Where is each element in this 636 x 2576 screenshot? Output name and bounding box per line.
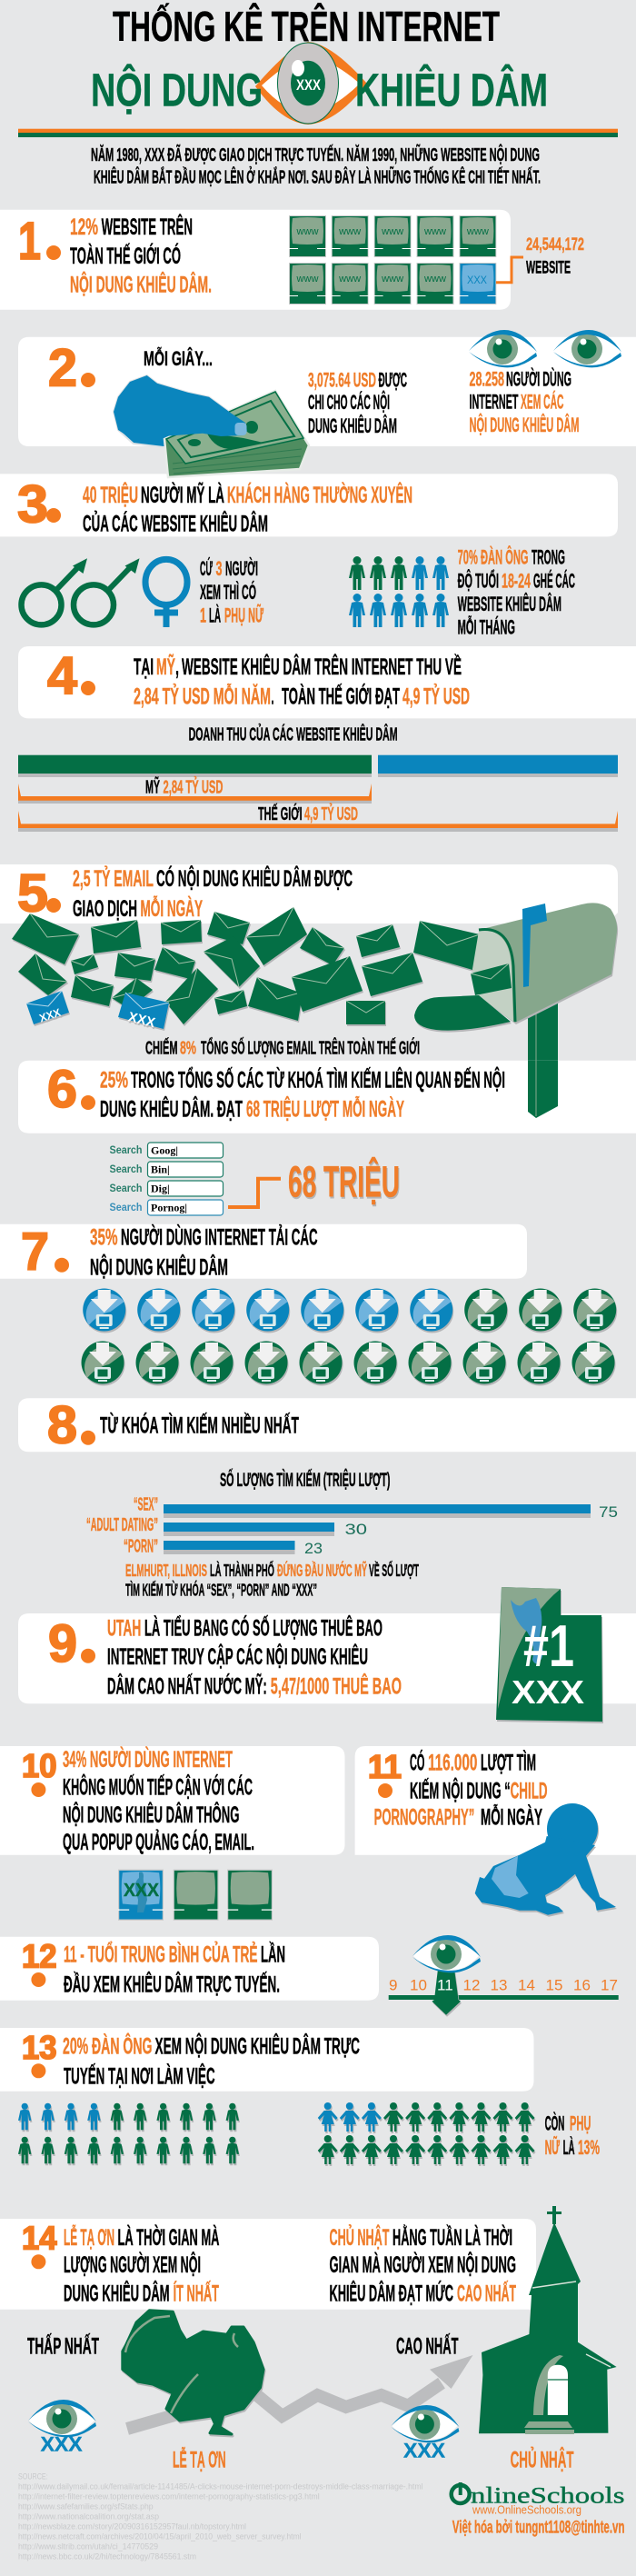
- women percentage text: [545, 2112, 600, 2159]
- text block: [100, 1066, 505, 1122]
- one in three text: LÀ: [209, 604, 221, 626]
- icon grid: monitors: www: [338, 226, 361, 237]
- text block: [90, 1223, 318, 1281]
- text block: CHILD: [511, 1778, 548, 1803]
- icon: crawling baby: [475, 1803, 616, 1915]
- website count: 24,544,172: [526, 235, 584, 255]
- text block: CỦA CÁC WEBSITE KHIÊU DÂM: [83, 509, 268, 536]
- blue envelope small: [26, 991, 69, 1024]
- icon grid: monitors: [289, 216, 496, 304]
- viewers text: [469, 367, 580, 436]
- one in three text: NGƯỜI: [225, 557, 258, 580]
- number 8: [47, 1395, 95, 1454]
- revenue chart: [18, 723, 618, 832]
- number 6: [47, 1060, 95, 1119]
- men 18-24 text: ĐỘ TUỔI: [458, 569, 499, 592]
- number 4: 4: [47, 646, 77, 705]
- bar chart: search volume: VỀ SỐ LƯỢT: [369, 1561, 419, 1580]
- empty monitors: [174, 1870, 273, 1920]
- men 18-24 text: TRONG: [532, 546, 565, 569]
- text block: 2,84 TỶ USD MỖI NĂM: [134, 682, 271, 709]
- bar: porn: “PORN”: [124, 1536, 158, 1556]
- bar: sex: “SEX”: [134, 1495, 158, 1515]
- text block: CÓ: [410, 1748, 424, 1775]
- number 11: 11: [368, 1748, 402, 1785]
- logo url: www.OnlineSchools.org: [472, 2503, 581, 2517]
- chart title: SỐ LƯỢNG TÌM KIẾM (TRIỆU LƯỢT): [220, 1469, 391, 1491]
- age numbers: 10: [410, 1976, 427, 1993]
- age numbers: [389, 1976, 618, 1993]
- bar: adult dating: 30: [345, 1521, 367, 1538]
- panel 14: lowest and highest days: CAO NHẤT: [457, 2281, 516, 2307]
- number 2: [48, 338, 95, 397]
- search box Dig: Search: [109, 1182, 142, 1194]
- viewers text: INTERNET: [469, 390, 519, 413]
- proportion bars: [18, 755, 618, 777]
- icon: eye with XXX pupil: XXX: [296, 76, 322, 94]
- number 14: 14: [22, 2219, 56, 2256]
- xxx monitor: [118, 1870, 164, 1920]
- icon: Utah map: [496, 1587, 602, 1722]
- mailbox flag: [522, 904, 547, 987]
- search box Goog: Search: [109, 1143, 142, 1156]
- panel 14: lowest and highest days: [0, 2219, 536, 2310]
- text block: TUYẾN TẠI NƠI LÀM VIỆC: [64, 2062, 215, 2089]
- text block: [70, 213, 212, 298]
- age numbers: 12: [463, 1976, 480, 1993]
- money stack: [164, 391, 309, 477]
- world label: THẾ GIỚI: [258, 803, 303, 824]
- xxx low: XXX: [41, 2433, 83, 2456]
- blue xxx envelopes: [26, 991, 169, 1031]
- row 2: [82, 1342, 614, 1383]
- mailbox post: [528, 1000, 558, 1118]
- viewers text: XEM CÁC: [521, 390, 564, 413]
- one in three text: 3: [216, 557, 222, 580]
- panel 2: every second: ĐƯỢC: [378, 368, 407, 391]
- search box Pornog: [109, 1200, 224, 1215]
- money spent text: CHI CHO CÁC NỘI: [308, 391, 390, 414]
- title line 2: KHIÊU DÂM: [355, 64, 548, 116]
- US label: MỸ: [145, 776, 160, 798]
- text block: [64, 1940, 285, 1998]
- text block: [83, 481, 412, 536]
- sources: http://news.netcraft.com/archives/2010/04/15/april_2010_web_server_survey.html: [18, 2531, 302, 2541]
- panel 9: Utah: [18, 1587, 636, 1722]
- age numbers: 17: [601, 1976, 618, 1993]
- blue envelope large: XXX: [126, 1009, 157, 1031]
- blue envelope small: XXX: [37, 1006, 63, 1024]
- panel 8: top keywords: [18, 1395, 636, 1454]
- number 3: 3: [17, 474, 48, 534]
- xxx high: XXX: [403, 2439, 445, 2461]
- text block: NGƯỜI DÙNG INTERNET TẢI CÁC: [121, 1223, 318, 1250]
- text block: UTAH: [107, 1615, 141, 1641]
- heading: TỪ KHÓA TÌM KIẾM NHIỀU NHẤT: [100, 1412, 299, 1439]
- Thanksgiving text: ÍT NHẤT: [174, 2281, 219, 2307]
- age numbers: 15: [545, 1976, 562, 1993]
- pictogram: ten men: [349, 556, 449, 627]
- age axis: [389, 1995, 619, 2000]
- text block: TẠI: [134, 654, 154, 680]
- panel 10: popups: [0, 1745, 345, 1855]
- city note: ĐỨNG ĐẦU NƯỚC MỸ: [277, 1561, 367, 1580]
- panel 2: every second: [18, 330, 636, 446]
- panel 4: revenue: [18, 646, 636, 718]
- Thanksgiving text: LÀ THỜI GIAN MÀ: [118, 2223, 220, 2251]
- panel 5: emails: [0, 864, 618, 924]
- bar: sex: [134, 1495, 618, 1521]
- logo name: nlineSchools: [471, 2483, 625, 2508]
- header: [18, 3, 618, 188]
- icon: eye high: [391, 2405, 459, 2442]
- mailbox rim: [479, 929, 515, 1022]
- icon grid: monitors: www: [381, 226, 403, 237]
- caption: share of emails: TỔNG SỐ LƯỢNG EMAIL TRÊN TOÀN THẾ GIỚI: [201, 1036, 420, 1058]
- Sunday text: CHỦ NHẬT: [329, 2223, 389, 2251]
- bar: sex: 75: [599, 1503, 618, 1521]
- icon grid: monitors: www: [338, 274, 361, 285]
- number 7: [21, 1223, 69, 1282]
- Sunday text: KHIÊU DÂM ĐẠT MỨC: [329, 2280, 453, 2307]
- text block: KHÔNG MUỐN TIẾP CẬN VỚI CÁC: [63, 1772, 253, 1800]
- men 18-24 text: 18-24: [502, 569, 531, 592]
- connector: [496, 257, 523, 283]
- icon: eye with XXX pupil: [255, 42, 367, 125]
- search box Bin: Bin|: [151, 1163, 170, 1176]
- panel 7: downloads: [0, 1223, 527, 1282]
- text block: INTERNET TRUY CẬP CÁC NỘI DUNG KHIÊU: [107, 1642, 368, 1670]
- city note: ELMHURT, ILLNOIS: [125, 1562, 207, 1580]
- text block: PORNOGRAPHY”: [374, 1805, 474, 1831]
- text block: 25%: [100, 1068, 128, 1093]
- connector: [228, 1179, 281, 1207]
- text block: DÂM CAO NHẤT NƯỚC MỸ:: [107, 1672, 267, 1699]
- number 9: [48, 1614, 95, 1673]
- header rule: [18, 129, 618, 137]
- icon: Utah map: #1: [523, 1612, 574, 1679]
- text block: LÀ TIỂU BANG CÓ SỐ LƯỢNG THUÊ BAO: [144, 1613, 383, 1641]
- text block: 40 TRIỆU: [83, 481, 138, 508]
- US label: [145, 776, 224, 798]
- number 2: 2: [48, 338, 77, 397]
- pictogram: women: [318, 2102, 535, 2164]
- Sunday text: [329, 2223, 516, 2307]
- one in three text: CỨ: [200, 557, 213, 580]
- blue envelope large: [118, 993, 169, 1031]
- icon: Utah map: XXX: [512, 1673, 584, 1711]
- text block: 116.000: [428, 1750, 477, 1775]
- hand back: [114, 375, 238, 450]
- Thanksgiving text: DUNG KHIÊU DÂM: [64, 2280, 170, 2307]
- popup monitors: [118, 1870, 273, 1920]
- male symbol 1: [22, 558, 87, 624]
- label: highest: CAO NHẤT: [396, 2332, 458, 2359]
- money spent text: [308, 368, 407, 437]
- envelope flaps: [30, 907, 480, 1013]
- bar chart: search volume: [86, 1469, 618, 1600]
- age numbers: 16: [573, 1976, 591, 1993]
- world bracket: [18, 811, 618, 832]
- number 9: 9: [48, 1614, 77, 1673]
- text block: ĐẦU XEM KHIÊU DÂM TRỰC TUYẾN.: [64, 1971, 280, 1998]
- icon: church: [479, 2206, 617, 2434]
- text block: WEBSITE TRÊN: [102, 213, 193, 240]
- text block: 2,5 TỶ EMAIL: [73, 864, 154, 892]
- envelope cluster: [12, 907, 480, 1024]
- US bracket: [18, 784, 372, 804]
- text block: 20% ĐÀN ÔNG: [63, 2032, 152, 2059]
- panel 12: average age: [0, 1937, 379, 2001]
- sources: http://newsblaze.com/story/20090316152957faul.nb/topstory.html: [18, 2521, 246, 2531]
- number 1: [18, 212, 61, 271]
- marker: [432, 1969, 461, 2015]
- text block: NỘI DUNG KHIÊU DÂM THÔNG: [63, 1801, 239, 1828]
- text block: KIẾM NỘI DUNG “: [410, 1776, 511, 1803]
- number 4: [47, 646, 95, 705]
- sources: http://internet-filter-review.toptenreviews.com/internet-pornography-statistics-pg3.html: [18, 2491, 320, 2501]
- text block: [374, 1748, 548, 1831]
- number 5: 5: [17, 864, 48, 924]
- flying envelopes: [12, 907, 480, 1024]
- text: LỄ TẠ ƠN: [173, 2445, 226, 2472]
- text block: MỖI NGÀY: [140, 894, 203, 922]
- section 3 visuals: [22, 546, 575, 638]
- viewers text: 28.258: [469, 367, 504, 390]
- title line 2: NỘI DUNG: [91, 64, 263, 116]
- text block: KHÁCH HÀNG THƯỜNG XUYÊN: [227, 481, 412, 508]
- women percentage text: LÀ: [563, 2136, 575, 2159]
- panel 11: child keyword: [355, 1746, 636, 1915]
- world label: 4,9 TỶ USD: [304, 804, 358, 824]
- search box Dig: Dig|: [151, 1182, 170, 1194]
- text block: DUNG KHIÊU DÂM. ĐẠT: [100, 1094, 243, 1122]
- bar: adult dating: [86, 1515, 367, 1538]
- text block: [107, 1613, 402, 1699]
- callout: 68 million: 68 TRIỆU: [288, 1157, 400, 1207]
- website count: WEBSITE: [526, 259, 571, 278]
- icon grid: monitors: www: [295, 226, 319, 237]
- text block: NGƯỜI MỸ LÀ: [141, 481, 224, 508]
- text block: CÓ NỘI DUNG KHIÊU DÂM ĐƯỢC: [156, 864, 353, 892]
- icon grid: monitors: XXX: [467, 274, 487, 286]
- search box Pornog: Pornog|: [151, 1202, 187, 1214]
- one in three text: PHỤ NỮ: [224, 604, 263, 626]
- arrow: rising trend: [127, 2355, 472, 2429]
- website count: [526, 235, 584, 278]
- sources: [18, 2471, 423, 2561]
- number 6: 6: [47, 1060, 77, 1119]
- number 12: 12: [22, 1937, 56, 1974]
- text block: [134, 653, 470, 709]
- age numbers: 13: [491, 1976, 507, 1993]
- bar: porn: 23: [304, 1540, 323, 1557]
- age numbers: 14: [518, 1976, 535, 1993]
- number 13: 13: [22, 2029, 56, 2066]
- age scale: [389, 1935, 619, 2015]
- Sunday text: HẰNG TUẦN LÀ THỜI: [393, 2223, 512, 2251]
- bar: porn: [124, 1536, 323, 1557]
- age numbers: 9: [389, 1976, 397, 1993]
- text block: 11 - TUỔI TRUNG BÌNH CỦA TRẺ: [64, 1940, 258, 1967]
- city note: TÌM KIẾM TỪ KHÓA “SEX”, “PORN” AND “XXX”: [125, 1581, 317, 1600]
- number 10: 10: [22, 1747, 56, 1784]
- label: lowest: THẤP NHẤT: [27, 2332, 99, 2359]
- viewers text: NGƯỜI DÙNG: [506, 367, 571, 390]
- caption: share of emails: [145, 1036, 420, 1058]
- city note: [125, 1561, 419, 1600]
- number 8: 8: [47, 1395, 77, 1454]
- icon: hand holding money: [114, 375, 309, 477]
- heading: MỖI GIÂY...: [144, 346, 213, 370]
- search boxes: [109, 1143, 224, 1215]
- icon: eye low: [28, 2400, 96, 2437]
- icon grid: monitors: www: [295, 274, 319, 285]
- search box Pornog: Search: [109, 1201, 142, 1213]
- men 18-24 text: MỖI THÁNG: [458, 614, 515, 638]
- icon grid: monitors: www: [423, 274, 446, 285]
- text block: 35%: [90, 1224, 118, 1250]
- text block: GIAO DỊCH: [73, 896, 137, 922]
- logo: OnlineSchools: [452, 2482, 625, 2538]
- icon grid: monitors: www: [466, 226, 489, 237]
- icon: eye: [412, 1935, 481, 1972]
- search box Bin: Search: [109, 1163, 142, 1175]
- text block: 5,47/1000 THUÊ BAO: [271, 1672, 402, 1699]
- icon: male and female symbols: [22, 558, 187, 627]
- text block: MỖI NGÀY: [481, 1803, 542, 1831]
- pictogram: men: [18, 2103, 239, 2163]
- number 1: 1: [18, 212, 41, 271]
- panel 3: regular customers: [0, 474, 618, 536]
- search box Goog: [109, 1143, 224, 1158]
- male symbol 2: [74, 558, 140, 624]
- icon: turkey: [123, 2311, 263, 2434]
- text block: NỘI DUNG KHIÊU DÂM: [90, 1253, 228, 1281]
- row 1: [83, 1289, 616, 1331]
- Thanksgiving text: [64, 2223, 220, 2307]
- text block: QUA POPUP QUẢNG CÁO, EMAIL.: [63, 1828, 254, 1855]
- number 7: 7: [21, 1223, 49, 1282]
- text block: 68 TRIỆU LƯỢT MỖI NGÀY: [246, 1094, 404, 1122]
- Thanksgiving text: LƯỢNG NGƯỜI XEM NỘI: [64, 2251, 201, 2278]
- text block: LƯỢT TÌM: [481, 1749, 536, 1775]
- one in three text: XEM THÌ CÓ: [200, 581, 256, 604]
- icon grid: monitors: www: [423, 226, 446, 237]
- text block: TOÀN THẾ GIỚI ĐẠT: [282, 682, 400, 709]
- sources: http://www.safefamilies.org/sfStats.php: [18, 2501, 154, 2511]
- women percentage text: CÒN: [545, 2112, 564, 2134]
- women percentage text: NỮ: [545, 2136, 560, 2159]
- bar: adult dating: “ADULT DATING”: [86, 1515, 158, 1535]
- text block: LẦN: [261, 1941, 285, 1967]
- sources: SOURCE:: [18, 2471, 48, 2481]
- chart title: DOANH THU CỦA CÁC WEBSITE KHIÊU DÂM: [189, 723, 398, 744]
- text block: TOÀN THẾ GIỚI CÓ: [70, 242, 181, 269]
- icon: mailbox: [414, 903, 617, 1031]
- mailbox post overlap: [528, 1061, 558, 1118]
- number 3: [17, 474, 61, 534]
- mailbox opening: [472, 931, 513, 1022]
- icon: two eyes: [469, 330, 621, 367]
- xxx monitor: XXX: [124, 1881, 160, 1901]
- caption: share of emails: 8%: [180, 1038, 196, 1058]
- text block: XEM NỘI DUNG KHIÊU DÂM TRỰC: [154, 2032, 360, 2059]
- caption: share of emails: CHIẾM: [145, 1037, 178, 1058]
- US label: 2,84 TỶ USD: [164, 776, 224, 798]
- text block: [63, 2032, 360, 2089]
- sources: http://www.dailymail.co.uk/femail/article-1141485/A-clicks-mouse-internet-porn-destroys-middle-class-marriage-.html: [18, 2481, 423, 2491]
- women percentage text: PHỤ: [570, 2112, 591, 2134]
- text block: ,: [175, 654, 179, 680]
- title line 2: [91, 64, 548, 116]
- one in three text: [200, 557, 263, 626]
- label: Sunday: CHỦ NHẬT: [511, 2445, 574, 2472]
- text block: MỸ: [156, 653, 175, 680]
- money spent text: DUNG KHIÊU DÂM: [308, 414, 397, 437]
- Thanksgiving text: LỄ TẠ ƠN: [64, 2223, 114, 2251]
- women percentage text: 13%: [578, 2136, 600, 2159]
- icon grid: monitors: www: [381, 274, 403, 285]
- panel 6: search keywords: [18, 1060, 636, 1133]
- men 18-24 text: [458, 546, 575, 638]
- search box Goog: Goog|: [151, 1143, 178, 1156]
- city note: LÀ THÀNH PHỐ: [210, 1561, 274, 1580]
- mailbox door: [414, 995, 511, 1031]
- search box Dig: [109, 1181, 224, 1196]
- sources: http://www.sltrib.com/utah/ci_14770529: [18, 2541, 158, 2551]
- one in three text: 1: [200, 604, 206, 626]
- text block: 34% NGƯỜI DÙNG INTERNET: [63, 1745, 233, 1772]
- icon: power O: [452, 2482, 470, 2503]
- number 5: [17, 864, 61, 924]
- envelope in mailbox: [471, 964, 512, 995]
- panel 1: share of websites: [0, 210, 584, 310]
- sources: http://www.nationalcoalition.org/stat.asp: [18, 2511, 159, 2521]
- men 18-24 text: 70% ĐÀN ÔNG: [458, 546, 529, 569]
- text block: .: [271, 684, 274, 709]
- text block: 12%: [70, 215, 98, 240]
- text block: [73, 864, 353, 922]
- search box Bin: [109, 1162, 224, 1177]
- text: GHÉ CÁC: [533, 569, 575, 592]
- panel 13: at work: [0, 2028, 534, 2092]
- age numbers: 11: [437, 1976, 453, 1993]
- intro text: [91, 144, 541, 188]
- mailbox body: [479, 903, 617, 1023]
- money spent text: 3,075.64 USD: [308, 368, 376, 391]
- download icons: [82, 1289, 616, 1383]
- text block: [63, 1745, 254, 1855]
- text block: NỘI DUNG KHIÊU DÂM.: [70, 271, 212, 298]
- sources: http://news.bbc.co.uk/2/hi/technology/7845561.stm: [18, 2551, 196, 2561]
- hand front: [114, 375, 247, 442]
- text block: 4,9 TỶ USD: [402, 682, 470, 709]
- female symbol: [145, 559, 187, 627]
